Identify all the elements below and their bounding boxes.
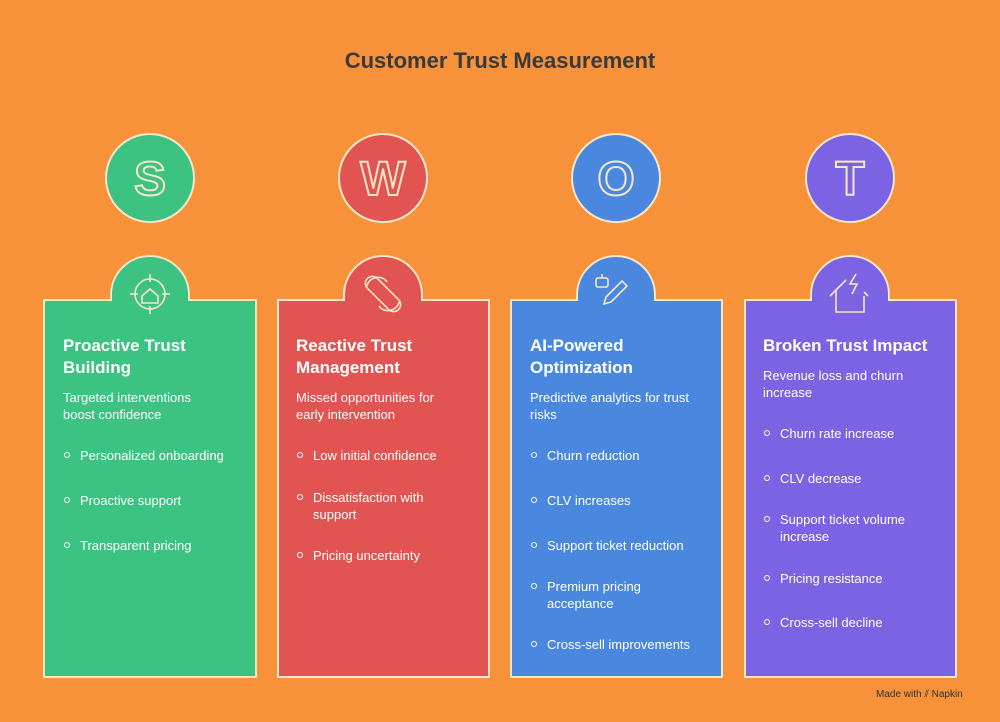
column 4 text xyxy=(763,336,928,630)
column 4 text: Churn rate increase xyxy=(780,426,894,441)
column 1 text: Proactive Trust Building xyxy=(63,336,186,377)
circle O: O xyxy=(597,153,635,206)
circle T: T xyxy=(835,153,865,206)
circle S: S xyxy=(134,153,166,206)
circle T xyxy=(806,134,894,222)
column 4 text: Pricing resistance xyxy=(780,571,883,586)
column 3 text: Premium pricing acceptance xyxy=(547,579,641,611)
title: Customer Trust Measurement xyxy=(345,48,655,73)
icon: broken house xyxy=(830,274,868,312)
column 2 text: Reactive Trust Management xyxy=(296,336,412,377)
column 2 text xyxy=(296,336,437,563)
circle W: W xyxy=(360,153,406,206)
panel: green xyxy=(44,256,256,677)
circle W xyxy=(339,134,427,222)
panel: red xyxy=(278,256,489,677)
column 4 text: Support ticket volume increase xyxy=(780,512,905,544)
column 2 text: Pricing uncertainty xyxy=(313,548,420,563)
column 1 text: Transparent pricing xyxy=(80,538,192,553)
column 3 text: Churn reduction xyxy=(547,448,640,463)
column 4 text: Revenue loss and churn increase xyxy=(763,368,903,400)
column 1 text xyxy=(63,336,224,553)
footer credit: Made with ⫽ Napkin xyxy=(876,689,963,700)
circle S xyxy=(106,134,194,222)
column 2 text: Low initial confidence xyxy=(313,448,437,463)
column 3 text: Support ticket reduction xyxy=(547,538,684,553)
column 3 text: Predictive analytics for trust risks xyxy=(530,390,689,422)
column 3 text: AI-Powered Optimization xyxy=(530,336,633,377)
column 4 text: Cross-sell decline xyxy=(780,615,883,630)
column 2 text: Dissatisfaction with support xyxy=(313,490,424,522)
column 3 text: CLV increases xyxy=(547,493,631,508)
column 3 text xyxy=(530,336,690,652)
column 1 text: Personalized onboarding xyxy=(80,448,224,463)
icon: target home xyxy=(130,274,170,314)
column 1 text: Targeted interventions boost confidence xyxy=(63,390,191,422)
column 4 text: CLV decrease xyxy=(780,471,861,486)
column 3 text: Cross-sell improvements xyxy=(547,637,690,652)
column 1 text: Proactive support xyxy=(80,493,181,508)
panel: blue xyxy=(511,256,722,677)
icon: bandage xyxy=(362,273,404,315)
panel: purple xyxy=(745,256,956,677)
column 2 text: Missed opportunities for early intervention xyxy=(296,390,434,422)
icon: robot pencil xyxy=(596,274,627,304)
column 4 text: Broken Trust Impact xyxy=(763,336,927,355)
circle O xyxy=(572,134,660,222)
